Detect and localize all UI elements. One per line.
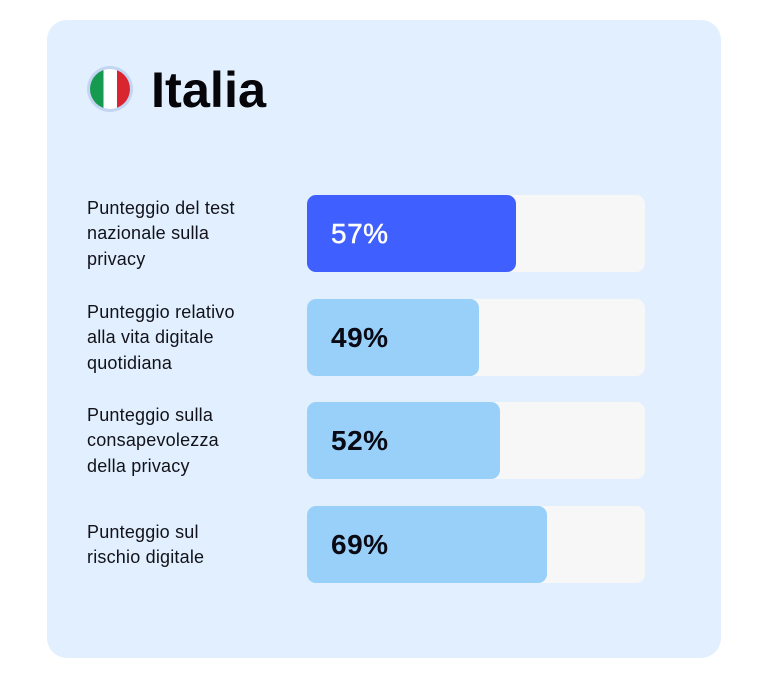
icon: Italian flag bbox=[87, 66, 133, 112]
label: daily digital life score bbox=[87, 302, 235, 373]
label: national test score: privacy bbox=[87, 248, 145, 268]
bar: daily digital life score 49%: 49% bbox=[331, 322, 389, 353]
bar: daily digital life score 49% bbox=[307, 299, 645, 376]
label: digital risk score: rischio digitale bbox=[87, 547, 204, 567]
label: daily digital life score: Punteggio relativo bbox=[87, 302, 235, 322]
title: Italia bbox=[151, 61, 266, 118]
bar: privacy awareness score 52%: 52% bbox=[331, 425, 389, 456]
bar: digital risk score 69% bbox=[307, 506, 645, 583]
label: national test score: nazionale sulla bbox=[87, 223, 209, 243]
label: digital risk score bbox=[87, 522, 204, 567]
bar: privacy awareness score 52% bbox=[307, 402, 645, 479]
label: digital risk score: Punteggio sul bbox=[87, 522, 199, 542]
label: privacy awareness score: della privacy bbox=[87, 456, 190, 476]
label: national test score: Punteggio del test bbox=[87, 198, 235, 218]
bar: national test score 57%: 57% bbox=[331, 218, 389, 249]
label: national test score bbox=[87, 198, 235, 269]
bar: national test score 57% bbox=[307, 195, 645, 272]
label: daily digital life score: alla vita digitale bbox=[87, 327, 214, 347]
label: privacy awareness score bbox=[87, 404, 219, 476]
label: privacy awareness score: Punteggio sulla bbox=[87, 404, 213, 424]
bar: digital risk score 69%: 69% bbox=[331, 529, 389, 560]
label: daily digital life score: quotidiana bbox=[87, 352, 172, 372]
label: privacy awareness score: consapevolezza bbox=[87, 430, 219, 450]
